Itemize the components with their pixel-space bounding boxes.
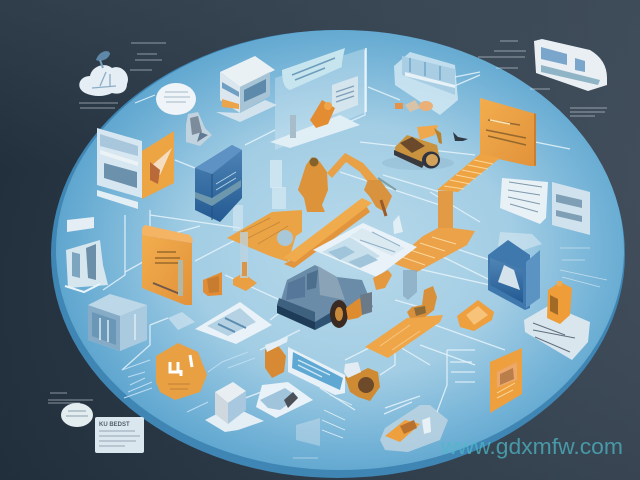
bottom left bubble and note card: KU BEDST: [99, 422, 130, 428]
glass tubes on platform: [233, 160, 286, 231]
orange technician station: [270, 100, 360, 148]
blue box with white shape: [488, 240, 540, 310]
icon: small machine under bubble: [186, 112, 212, 146]
central blueprint platform: [313, 215, 417, 277]
watermark: www.gdxmfw.com: [440, 434, 623, 459]
large orange book: [142, 225, 193, 305]
excavator: [382, 125, 468, 170]
lower orange robot platform: [365, 286, 443, 358]
white document stack bottom: [296, 395, 352, 446]
white document cards: [500, 178, 590, 235]
bottom left bubble and note card: [61, 403, 144, 453]
document with orange face: [97, 128, 174, 209]
orange sign board and stair: [392, 98, 536, 272]
orange robot with truss arm: [298, 153, 396, 216]
blue server block: [195, 145, 242, 222]
callout text: right: [560, 248, 607, 287]
left glass tablet: [65, 217, 108, 292]
orange tower marker: [233, 232, 257, 291]
speech bubble: [135, 83, 196, 115]
callout text: lower centre: [384, 350, 475, 414]
callout text: bottom left: [48, 393, 93, 403]
glass cube: [88, 294, 147, 351]
icon: cloud with antenna: [79, 51, 128, 96]
panel: transparent screen with sign: [275, 48, 366, 150]
orange hexagon badge: [156, 343, 207, 400]
callout text: left of hexagon: [122, 352, 255, 412]
transparent grid on upper right: [498, 232, 542, 275]
callout text: top right: [478, 41, 607, 116]
orange robot assembly platform: [227, 198, 372, 268]
small orange pod: [457, 300, 494, 331]
small isometric building and device: [205, 382, 313, 432]
callout text: cloud: [79, 43, 166, 108]
blue truck: [277, 265, 417, 330]
glass room: [394, 52, 458, 115]
connector lines: [103, 50, 570, 410]
small label bottom: [293, 457, 318, 459]
isometric building: [216, 56, 277, 122]
top right rounded panel: [534, 39, 607, 91]
blue screen panel: [265, 337, 345, 395]
orange hex gauge: [344, 362, 380, 401]
orange book card: [490, 348, 522, 413]
orange square block: [203, 272, 222, 296]
small boat machine: [380, 405, 448, 452]
orange container on white plinth: [524, 281, 590, 360]
small schematic tile: [168, 302, 272, 344]
